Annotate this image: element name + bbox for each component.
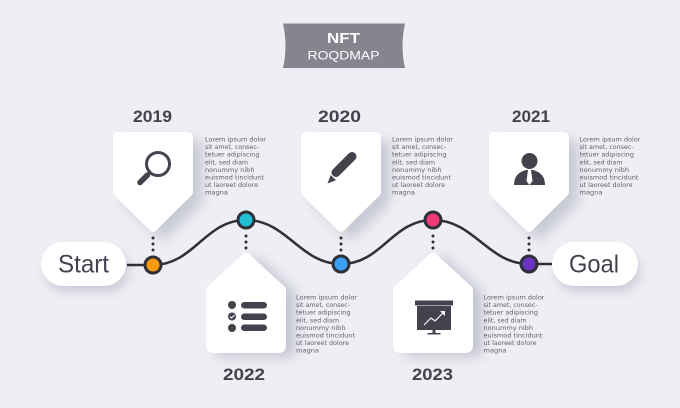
text block: 2020: nonummy nibh <box>392 166 442 174</box>
text block: 2022: sit amet, consec- <box>296 301 351 309</box>
text block: 2021: tetuer adipiscing <box>580 151 634 159</box>
icon: business person <box>514 153 545 185</box>
icon: pen <box>328 156 352 184</box>
text block: 2021: magna <box>580 189 603 197</box>
text block: 2021: ut laoreet dolore <box>580 181 632 189</box>
text block: 2021 <box>580 136 641 197</box>
text block: 2021: nonummy nibh <box>580 166 629 174</box>
text block: 2021: euismod tincidunt <box>580 174 639 182</box>
text block: 2020: elit, sed diam <box>392 158 435 166</box>
title banner: ROQDMAP <box>308 50 380 62</box>
start pill <box>41 242 129 292</box>
goal pill: Goal <box>569 250 619 278</box>
panel: 2019 milestone <box>113 132 203 240</box>
text block: 2023: magna <box>484 347 507 355</box>
connector dots <box>152 234 530 252</box>
panel: 2020 milestone <box>301 132 391 240</box>
text block: 2019: sit amet, consec- <box>205 143 260 151</box>
text block: 2020: euismod tincidunt <box>392 174 451 182</box>
text block: 2019 <box>205 136 266 197</box>
panel: 2021 milestone <box>489 132 579 240</box>
text block: 2020: tetuer adipiscing <box>392 151 446 159</box>
year 2021: 2021 <box>512 107 550 126</box>
timeline nodes <box>145 212 537 273</box>
text block: 2019: elit, sed diam <box>205 158 248 166</box>
year 2022: 2022 <box>223 365 265 384</box>
year 2020: 2020 <box>318 107 361 126</box>
icon: checklist <box>228 301 267 332</box>
text block: 2019: nonummy nibh <box>205 166 255 174</box>
title banner <box>283 24 405 68</box>
text block: 2022: ut laoreet dolore <box>296 339 349 347</box>
text block: 2020: Lorem ipsum dolor <box>392 136 453 144</box>
text block: 2019: magna <box>205 189 228 197</box>
text block: 2023: nonummy nibh <box>484 324 533 332</box>
text block: 2022: nonummy nibh <box>296 324 346 332</box>
text block: 2023 <box>484 294 545 355</box>
text block: 2019: tetuer adipiscing <box>205 151 260 159</box>
text block: 2021: elit, sed diam <box>580 158 622 166</box>
goal pill <box>552 242 640 292</box>
text block: 2022: euismod tincidunt <box>296 332 355 340</box>
text block: 2019: euismod tincidunt <box>205 174 264 182</box>
text block: 2022: Lorem ipsum dolor <box>296 294 357 302</box>
start pill: Start <box>58 250 109 278</box>
text block: 2023: elit, sed diam <box>484 316 526 324</box>
text block: 2023: Lorem ipsum dolor <box>484 294 545 302</box>
year 2023: 2023 <box>412 365 453 384</box>
text block: 2023: ut laoreet dolore <box>484 339 536 347</box>
text block: 2021: sit amet, consec- <box>580 143 634 151</box>
text block: 2023: tetuer adipiscing <box>484 309 538 317</box>
year 2019: 2019 <box>133 107 172 126</box>
timeline curve <box>127 220 552 265</box>
icon: presentation screen <box>415 300 453 334</box>
text block: 2023: sit amet, consec- <box>484 301 538 309</box>
panel: 2022 milestone <box>206 253 296 357</box>
title banner: NFT <box>327 30 360 47</box>
text block: 2020: sit amet, consec- <box>392 143 447 151</box>
text block: 2019: Lorem ipsum dolor <box>205 136 266 144</box>
panel: 2023 milestone <box>393 253 483 357</box>
text block: 2023: euismod tincidunt <box>484 332 543 340</box>
text block: 2019: ut laoreet dolore <box>205 181 258 189</box>
text block: 2020 <box>392 136 453 197</box>
text block: 2020: magna <box>392 189 415 197</box>
text block: 2022: tetuer adipiscing <box>296 309 350 317</box>
text block: 2021: Lorem ipsum dolor <box>580 136 641 144</box>
text block: 2022 <box>296 294 357 355</box>
icon: magnifying glass <box>140 152 170 182</box>
text block: 2022: elit, sed diam <box>296 316 339 324</box>
text block: 2022: magna <box>296 347 319 355</box>
text block: 2020: ut laoreet dolore <box>392 181 445 189</box>
